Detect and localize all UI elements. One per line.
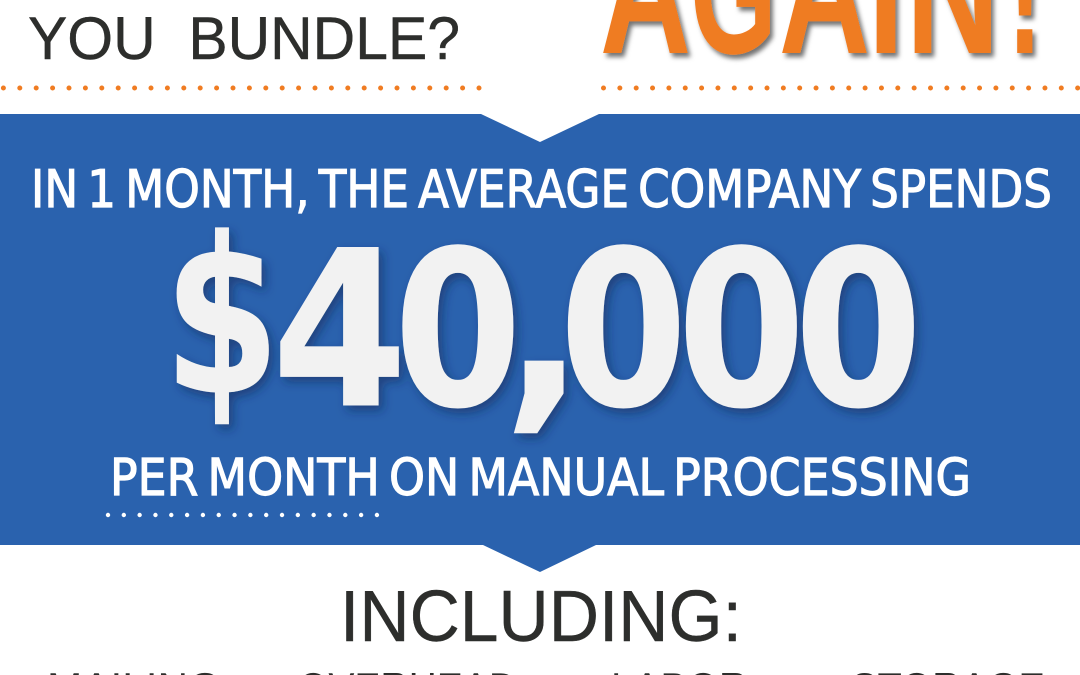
big number: $40,000: $ [164,193,280,444]
heading: again [600,0,1043,92]
blue panel with notch and arrow [0,114,1080,572]
cost categories row [47,664,1045,675]
white dotted underline [108,513,378,517]
big number: $40,000: 0 [794,206,922,457]
big number: $40,000: 0 [560,206,687,457]
orange dotted divider: left [3,86,484,90]
big number: $40,000 [164,193,922,457]
heading: including: INCLUDING: [340,577,742,657]
heading: you bundle: YOU BUNDLE? [28,5,460,72]
orange dotted divider: right [604,86,1080,90]
big number: $40,000: , [503,202,585,453]
big number: $40,000: 0 [394,206,522,457]
big number: $40,000: 0 [678,206,805,457]
subheading: per month: PER MONTH ON MANUAL PROCESSING [110,449,971,508]
big number: $40,000: 4 [272,205,407,457]
